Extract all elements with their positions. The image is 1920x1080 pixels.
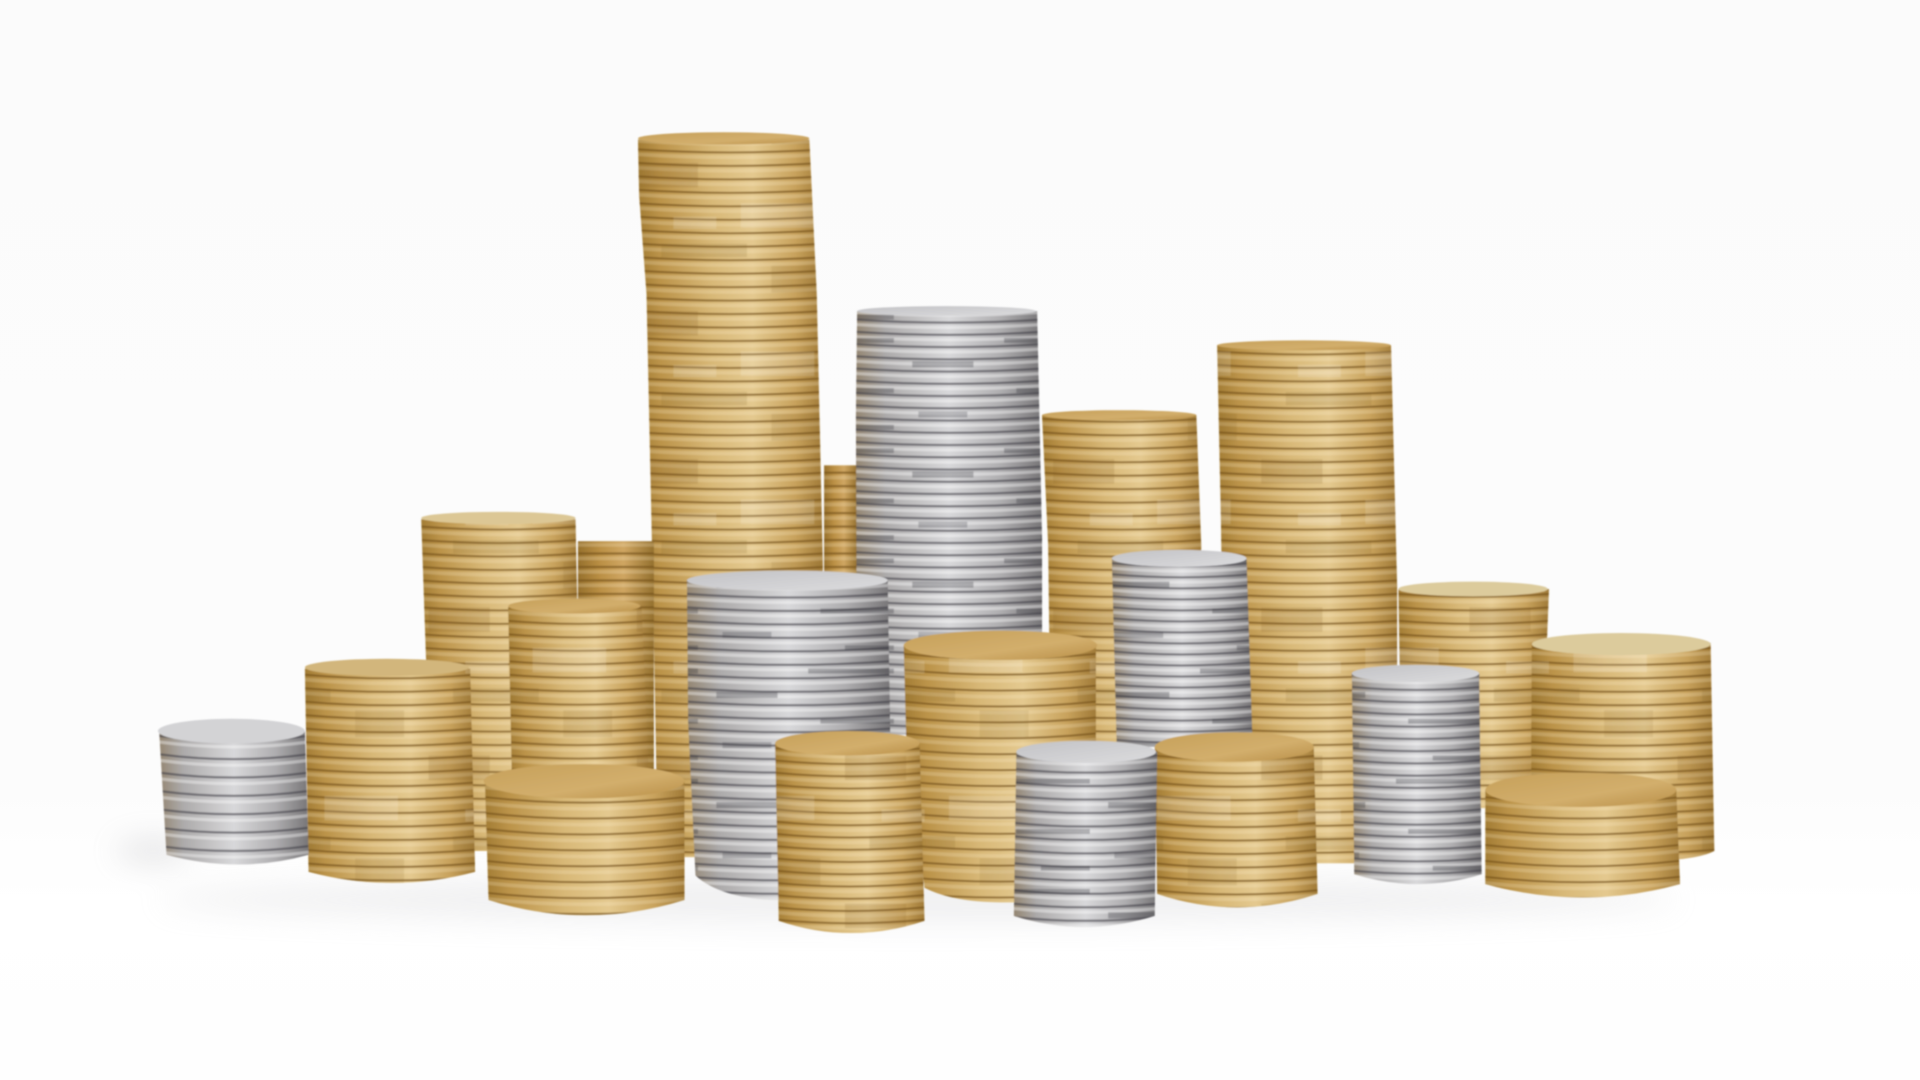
stack: silver right: [1352, 665, 1482, 884]
stack: tallest gold: [638, 132, 823, 857]
stack: silver upper right: [1112, 550, 1253, 747]
stack: gold far right: [1531, 633, 1714, 861]
stack: silver centre left: [687, 571, 890, 900]
stack: gold back left: [578, 541, 654, 771]
stack: gold low wide: [484, 764, 684, 915]
stack: tall gold right: [1217, 340, 1397, 863]
stack: gold left middle: [508, 599, 649, 778]
stack: gold front centre: [775, 731, 924, 933]
stack: small gold behind: [824, 465, 857, 576]
stack: gold centre wide: [904, 631, 1097, 903]
stack: silver front centre: [1014, 741, 1157, 927]
floor shadow: [116, 839, 1678, 922]
stack: gold left front: [305, 659, 475, 883]
stack: gold front right: [1155, 732, 1318, 907]
stack: tall silver: [856, 306, 1042, 735]
coin stacks: [158, 132, 1714, 933]
stack: silver far left: [158, 719, 309, 864]
stack: gold left tall: [421, 512, 578, 851]
stack: gold low right: [1485, 773, 1680, 898]
stack: gold right back: [1398, 582, 1549, 808]
stack: gold centre right: [1042, 410, 1201, 747]
